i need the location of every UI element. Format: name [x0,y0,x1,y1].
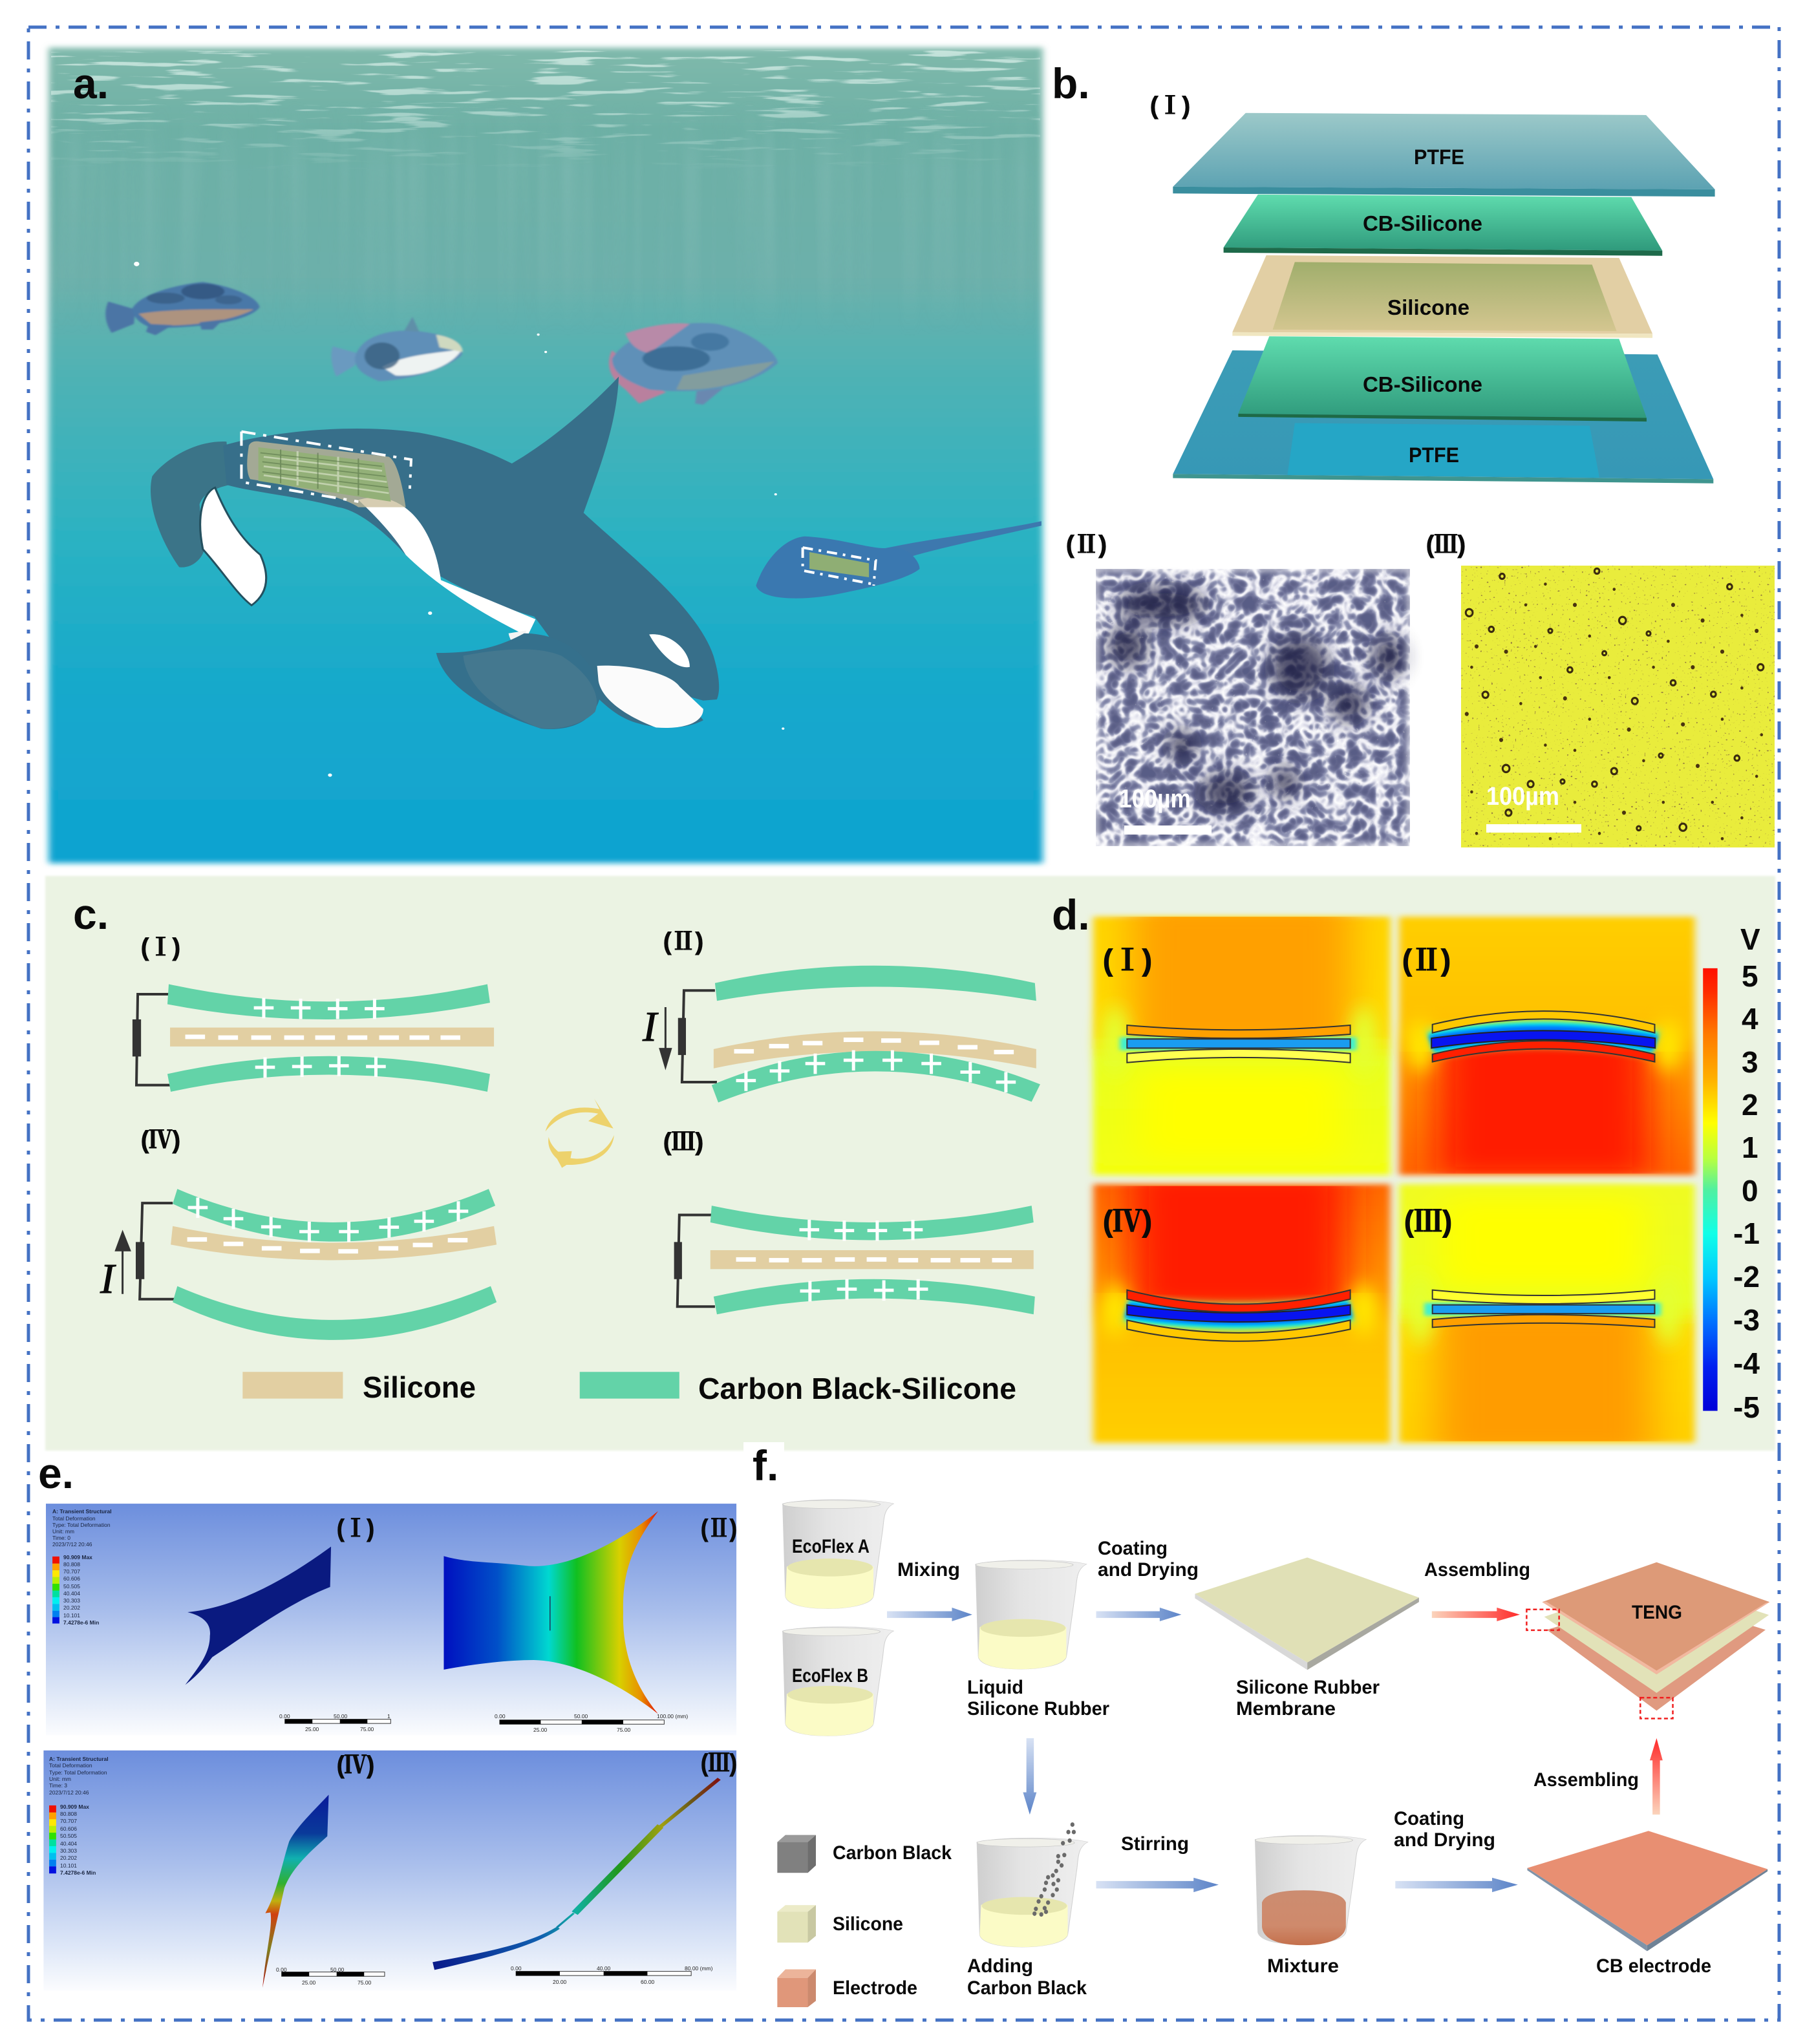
label e: e. [38,1449,74,1497]
deformation IV [262,1794,328,1988]
deformation III [433,1779,719,1970]
deformation I [185,1546,331,1685]
legend values IV: 30.303 [60,1847,77,1854]
legend values I: 80.808 [63,1561,80,1568]
scale values: 80.00 (mm) [685,1965,713,1972]
scale values: 50.00 [574,1713,588,1719]
water surface ripples [51,50,1040,171]
arrow: stirring [1096,1878,1219,1892]
step texts: Carbon Black [833,1842,952,1864]
scale bar [1486,824,1581,833]
scale values: 75.00 [617,1727,631,1733]
simulation IV [1093,1168,1391,1443]
scale values: 75.00 [360,1726,374,1732]
arrow: mixing [887,1608,972,1621]
header text I: Time: 0 [52,1535,70,1541]
header text I: A: Transient Structural [52,1508,112,1515]
layer: lower CB-Silicone [1238,336,1647,418]
scale text: 100µm [1119,785,1191,813]
scale values: 75.00 [358,1979,372,1986]
label a: a. [73,59,109,107]
label d-IV: (Ⅳ) [1103,1204,1152,1238]
state III [674,1206,1035,1314]
header text IV: Total Deformation [49,1762,92,1769]
colour bar ticks: 3 [1742,1045,1758,1079]
step texts: Coating [1098,1538,1168,1559]
orca: eye patch [649,634,690,667]
scale values: 25.00 [533,1727,548,1733]
scale values: 25.00 [305,1726,319,1732]
exploded layer stack [1173,113,1715,484]
legend values I: 70.707 [63,1568,80,1575]
layer label: CB-Silicone [1363,372,1482,396]
label d-I: (Ⅰ) [1103,943,1152,977]
legend values IV: 70.707 [60,1818,77,1824]
legend cube: carbon black [777,1835,816,1873]
label e-III: (Ⅲ) [701,1750,737,1777]
legend values I: 50.505 [63,1583,80,1590]
light rays [412,156,829,217]
step texts [792,1536,1711,1999]
step texts: Coating [1394,1808,1464,1829]
header text IV [49,1756,109,1796]
step texts: EcoFlex A [792,1536,870,1557]
beaker liquid silicone rubber [976,1560,1087,1669]
colour bar ticks: 5 [1742,959,1758,993]
orca: white flank [358,497,535,636]
legend text: Silicone: Silicone [363,1370,476,1404]
header text I: Type: Total Deformation [52,1522,111,1528]
label e-IV: (Ⅳ) [337,1752,374,1779]
state IV [114,1189,497,1340]
arrow: adding [1023,1738,1036,1815]
arrow: assembling [1432,1608,1520,1621]
arrow: current up [122,1246,123,1294]
legend values IV: 60.606 [60,1826,77,1832]
label d-II: (Ⅱ) [1402,943,1451,977]
legend values I: 10.101 [63,1612,80,1619]
colour bar ticks: V [1740,922,1760,956]
step texts: Mixing [897,1559,960,1581]
pale green background [45,876,1775,1451]
colour bar ticks: -1 [1733,1217,1760,1250]
header text IV: A: Transient Structural [49,1756,109,1762]
panel b: layers and micrographs [1052,59,1775,847]
CB electrode sheet [1527,1831,1768,1951]
step texts: and Drying [1394,1829,1495,1851]
step texts: Mixture [1267,1955,1339,1977]
simulation II [1399,917,1695,1178]
label b-II: (Ⅱ) [1066,531,1107,559]
carbon black particles [1032,1822,1076,1917]
scale values: 40.00 [597,1965,611,1972]
colour bar ticks: 2 [1742,1088,1758,1122]
label d-III: (Ⅲ) [1404,1204,1452,1238]
header text I: 2023/7/12 20:46 [52,1541,92,1548]
fish 2 [331,317,463,381]
TENG stack [1526,1562,1769,1718]
colour bar ticks: 1 [1742,1131,1758,1164]
legend cube: silicone [777,1905,816,1943]
scale values: 0.00 [276,1966,287,1973]
layer: top PTFE [1173,113,1715,189]
colour bar ticks: 4 [1742,1002,1758,1036]
dashed highlight [1526,1610,1559,1630]
layer: silicone [1232,255,1652,334]
scale values: 25.00 [302,1979,316,1986]
label c-I: (Ⅰ) [141,934,180,961]
scale values: 50.00 [334,1713,348,1719]
legend values IV: 7.4278e-6 Min [60,1869,96,1876]
simulation background top [46,1504,736,1735]
layer: bottom PTFE [1173,350,1713,479]
panel d: potential simulations [1052,891,1760,1458]
layer: upper CB-Silicone [1224,195,1662,251]
beaker mixture [1255,1835,1366,1945]
step texts: and Drying [1098,1559,1199,1581]
legend values IV: 90.909 Max [60,1804,89,1810]
deformation II [443,1511,658,1714]
legend values I: 60.606 [63,1575,80,1582]
step texts: Assembling [1424,1559,1530,1581]
step texts: Stirring [1121,1833,1189,1855]
scale values: 0.00 [495,1713,506,1719]
white tab behind label f [743,1442,784,1462]
label b-III: (Ⅲ) [1426,531,1466,559]
fish 1 [105,282,260,335]
scale values: 0.00 [511,1965,522,1972]
orca [151,377,719,729]
legend values I: 30.303 [63,1597,80,1604]
legend values IV: 20.202 [60,1855,77,1861]
orca: pectoral fin [436,633,601,729]
legend values I: 7.4278e-6 Min [63,1619,99,1626]
panel c: working mechanism [45,876,1775,1451]
micrograph II [1096,569,1410,846]
scale bars [282,1719,691,1976]
legend values I [63,1554,99,1626]
label c: c. [73,890,109,938]
panel f: fabrication flow [743,1442,1769,2007]
layer label: PTFE [1409,443,1459,467]
current label II: I [642,1003,659,1050]
header text IV: Time: 3 [49,1782,67,1789]
header text IV: Unit: mm [49,1776,71,1782]
arrow: coating [1096,1608,1181,1621]
dashed highlight [1640,1698,1673,1718]
step texts: Silicone [833,1913,903,1935]
step texts: Silicone Rubber [1236,1677,1380,1698]
legend swatches [242,1372,679,1399]
beaker adding carbon black [977,1822,1088,1947]
legend values IV: 80.808 [60,1811,77,1817]
colour bar ticks [1733,922,1760,1424]
orca: white tail patch [200,487,266,605]
arrow: assembling up [1650,1738,1663,1815]
scale values: 0.00 [279,1713,290,1719]
colour bar ticks: -3 [1733,1303,1760,1337]
orca: body [223,377,719,728]
orca: white chin [597,666,703,728]
orca: tail fluke [151,442,230,568]
scale values: 1 [387,1713,390,1719]
layer label: PTFE [1414,145,1464,169]
header text I: Unit: mm [52,1528,74,1535]
label c-III: (Ⅲ) [663,1129,703,1156]
header text I: Total Deformation [52,1515,96,1522]
diagrams [114,966,1040,1399]
legend values IV: 50.505 [60,1833,77,1839]
water background [48,48,1043,863]
cycle arrows [546,1099,614,1168]
simulation I [1093,899,1391,1175]
state II [659,966,1040,1103]
label d: d. [1052,891,1090,939]
label e-II: (Ⅱ) [701,1515,737,1542]
colour legend IV [49,1805,56,1873]
header text I [52,1508,112,1548]
simulation background bottom [43,1751,736,1990]
label e-I: (Ⅰ) [337,1515,374,1542]
legend values IV: 40.404 [60,1840,77,1847]
step texts: CB electrode [1596,1955,1711,1977]
arrow: current down [665,1007,667,1054]
legend values I: 40.404 [63,1590,80,1597]
scale bar [1124,825,1212,835]
current label IV: I [100,1255,116,1303]
step texts: TENG [1632,1602,1682,1623]
step texts: Electrode [833,1977,917,1999]
step texts: Liquid [967,1677,1023,1698]
arrow: coating 2 [1395,1878,1518,1892]
step texts: EcoFlex B [792,1665,868,1687]
header text IV: Type: Total Deformation [49,1769,107,1776]
beaker EcoFlex B [783,1627,893,1736]
label f: f. [753,1442,778,1489]
layer label: Silicone [1387,295,1469,319]
label c-II: (Ⅱ) [663,928,703,955]
step texts: Adding [967,1955,1033,1977]
scale values: 50.00 [330,1966,345,1973]
micrograph III [1461,566,1775,847]
colour bar [1703,968,1718,1411]
label b-I: (Ⅰ) [1150,92,1190,120]
stingray [756,521,1041,599]
header text IV: 2023/7/12 20:46 [49,1789,89,1796]
scale values: 20.00 [553,1979,567,1985]
scale values: 100.00 (mm) [657,1713,688,1719]
panel e: structural deformation [38,1449,737,1990]
panel a: underwater scene [48,48,1043,863]
bubbles [134,262,784,777]
step texts: Carbon Black [967,1977,1087,1999]
label c-IV: (Ⅳ) [141,1127,180,1154]
scale text: 100µm [1486,782,1559,811]
legend text: Carbon Black-Silicone: Carbon Black-Silicone [698,1372,1016,1405]
step texts: Membrane [1236,1698,1336,1719]
colour bar ticks: -2 [1733,1260,1760,1293]
layer label: CB-Silicone [1363,211,1482,235]
orca: sensor patch [247,442,406,507]
scale values [276,1713,713,1986]
colour bar ticks: -5 [1733,1390,1760,1424]
legend values I: 90.909 Max [63,1554,92,1560]
colour bar ticks: 0 [1742,1174,1758,1208]
legend values I: 20.202 [63,1604,80,1611]
scale values: 60.00 [641,1979,655,1985]
beaker EcoFlex A [783,1500,893,1609]
colour bar ticks: -4 [1733,1347,1760,1380]
label b: b. [1052,59,1090,107]
legend cube: electrode [777,1969,816,2007]
step texts: Assembling [1533,1769,1639,1791]
fish 3 [609,323,778,405]
legend values IV [60,1804,96,1876]
silicone membrane [1195,1557,1419,1670]
step texts: Silicone Rubber [967,1698,1109,1719]
colour legend I [52,1557,59,1624]
legend values IV: 10.101 [60,1862,77,1869]
simulation III [1399,1184,1695,1458]
orca: dashed box [241,432,411,502]
state I [133,984,494,1092]
